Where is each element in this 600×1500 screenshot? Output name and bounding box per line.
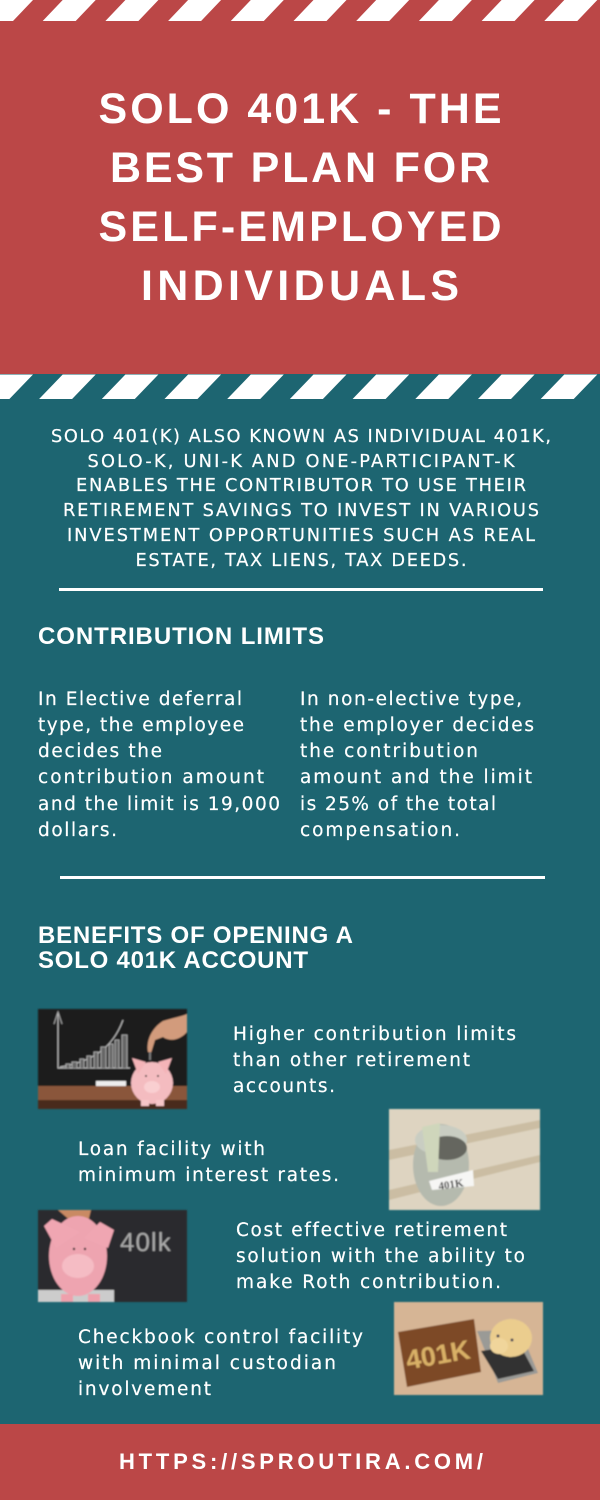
photo: 401k jar: 401K [438, 1177, 465, 1193]
photo: piggy with 401k on chalkboard [38, 1210, 187, 1302]
text: non-elective: compensation. [300, 820, 460, 841]
text: benefit 1: Higher contribution limits [233, 1024, 516, 1045]
text: elective deferral: dollars. [38, 820, 117, 841]
intro paragraph: SOLO 401(K) ALSO KNOWN AS INDIVIDUAL 401K, [51, 426, 551, 447]
title: BEST PLAN FOR [110, 144, 490, 192]
heading: benefits: BENEFITS OF OPENING A [38, 922, 353, 949]
title: SOLO 401K - THE [98, 85, 502, 133]
text: elective deferral: contribution amount [38, 767, 264, 788]
title [98, 85, 502, 310]
panel: teal background [0, 374, 600, 1424]
text: benefit 4: with minimal custodian [78, 1353, 336, 1374]
heading: contribution limits: CONTRIBUTION LIMITS [38, 623, 324, 650]
footer url: HTTPS://SPROUTIRA.COM/ [119, 1449, 483, 1474]
text: elective deferral: In Elective deferral [38, 689, 242, 710]
text: benefit 3: solution with the ability to [236, 1246, 525, 1267]
title: SELF-EMPLOYED [98, 203, 502, 251]
divider stripes between title and body [0, 374, 597, 399]
text: benefit 2: Loan facility with [78, 1139, 265, 1160]
photo: 401k card, calculator and gold piggy: 401K [404, 1335, 473, 1375]
heading: benefits: SOLO 401K ACCOUNT [38, 947, 308, 974]
text: non-elective: amount and the limit [300, 767, 532, 788]
text: benefit 4 [78, 1327, 363, 1400]
title: INDIVIDUALS [141, 262, 459, 310]
text: benefit 2: minimum interest rates. [78, 1165, 339, 1186]
text: benefit 3: make Roth contribution. [236, 1272, 501, 1293]
text: elective deferral: and the limit is 19,000 [38, 794, 280, 815]
text: non-elective: the employer decides [300, 715, 534, 736]
text: non-elective: is 25% of the total [300, 794, 496, 815]
text: benefit 3 [236, 1220, 525, 1293]
photo: piggy bank and chalk chart [38, 1009, 187, 1109]
intro paragraph: ENABLES THE CONTRIBUTOR TO USE THEIR [76, 475, 526, 496]
intro paragraph [51, 426, 551, 571]
photo: 401k card, calculator and gold piggy [394, 1302, 543, 1395]
text: benefit 1 [233, 1024, 516, 1097]
panel: footer [0, 1424, 600, 1500]
text: non-elective: In non-elective type, [300, 689, 522, 710]
intro paragraph: INVESTMENT OPPORTUNITIES SUCH AS REAL [67, 525, 535, 546]
intro paragraph: ESTATE, TAX LIENS, TAX DEEDS. [136, 550, 466, 571]
text: elective deferral: decides the [38, 741, 162, 762]
text: benefit 4: involvement [78, 1379, 211, 1400]
intro paragraph: RETIREMENT SAVINGS TO INVEST IN VARIOUS [63, 500, 539, 521]
panel: red title header [0, 0, 600, 374]
text: benefit 1: than other retirement [233, 1050, 470, 1071]
text: non-elective: the contribution [300, 741, 478, 762]
text: benefit 3: Cost effective retirement [236, 1220, 507, 1241]
photo: 401k jar [389, 1109, 540, 1210]
text: non-elective [300, 689, 534, 841]
top white diagonal stripes [0, 0, 597, 21]
heading: benefits [38, 922, 353, 974]
text: benefit 2 [78, 1139, 339, 1186]
text: elective deferral: type, the employee [38, 715, 244, 736]
photo: piggy with 401k on chalkboard: 40lk [120, 1227, 172, 1257]
text: benefit 4: Checkbook control facility [78, 1327, 363, 1348]
text: elective deferral [38, 689, 280, 841]
text: benefit 1: accounts. [233, 1076, 335, 1097]
intro paragraph: SOLO-K, UNI-K AND ONE-PARTICIPANT-K [88, 451, 516, 472]
